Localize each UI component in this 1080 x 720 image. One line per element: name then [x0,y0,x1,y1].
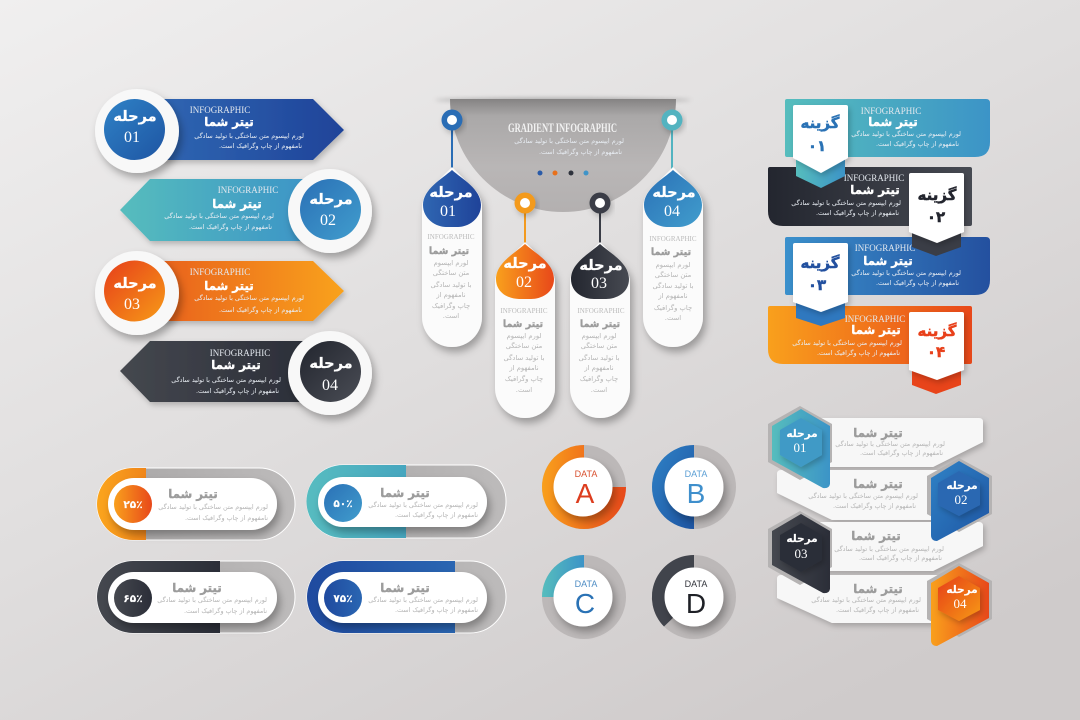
card 1 [422,110,482,347]
card 1: INFOGRAPHIC [427,233,475,241]
card 1: مرحله [429,185,473,201]
donut B: B [687,478,705,509]
pill 50 percent [306,465,506,538]
option 3 ribbon: نامفهوم از چاپ وگرافیک است. [876,279,959,287]
row 1 band: تیتر شما [853,426,903,441]
pill 50 percent: ۵۰٪ [333,498,353,510]
arrow 3 orange: لورم ایپسوم متن ساختگی با تولید سادگی [194,294,304,302]
option 4 ribbon: INFOGRAPHIC [845,314,905,324]
card 3: تیتر شما [580,319,620,330]
dome: نامفهوم از چاپ وگرافیک است. [539,148,622,156]
donut D [652,555,736,639]
donut B: DATA [685,469,707,479]
pill 50 percent: تیتر شما [380,486,430,501]
donut D: DATA [685,579,707,589]
card 4: متن ساختگی [655,270,692,279]
card 1: نامفهوم از [435,291,466,299]
option 1 ribbon: ۰۱ [808,137,826,155]
donut A: A [576,478,595,509]
arrow 3 orange: مرحله [113,276,157,292]
row 4 band: نامفهوم از چاپ وگرافیک است. [836,606,919,614]
dome: GRADIENT INFOGRAPHIC [508,120,617,135]
option 3 ribbon [785,237,990,326]
card 4: INFOGRAPHIC [649,235,697,243]
card 1: 01 [440,203,456,220]
card 4: چاپ وگرافیک [654,303,692,312]
option 4 ribbon [768,306,972,394]
pill 65 percent: تیتر شما [172,581,222,596]
card 2: است. [516,386,532,394]
pill 65 percent: نامفهوم از چاپ وگرافیک است. [184,607,267,615]
pill 75 percent: ۷۵٪ [333,593,353,605]
panel: option ribbons [768,99,990,394]
hexagon 1: 01 [794,440,806,455]
arrow 2 teal: تیتر شما [212,197,262,212]
arrow 4 dark: 04 [322,377,338,394]
pill 25 percent: ۲۵٪ [123,499,143,511]
option 2 ribbon [768,167,972,256]
donut A: DATA [575,469,597,479]
card 4: مرحله [652,185,696,201]
arrow 2 teal: INFOGRAPHIC [218,185,278,195]
arrow 2 teal: مرحله [309,192,353,208]
dome: لورم ایپسوم متن ساختگی با تولید سادگی [514,137,624,145]
row 2 band: لورم ایپسوم متن ساختگی با تولید سادگی [808,492,918,500]
card 3 [570,192,630,418]
pill 50 percent: نامفهوم از چاپ وگرافیک است. [395,511,478,519]
card 3: نامفهوم از [583,364,614,372]
option 1 ribbon [785,99,990,188]
pill 75 percent: لورم ایپسوم متن ساختگی با تولید سادگی [368,596,478,604]
pill 25 percent: نامفهوم از چاپ وگرافیک است. [185,514,268,522]
card 3: 03 [591,275,607,292]
row 4 band: لورم ایپسوم متن ساختگی با تولید سادگی [811,596,921,604]
pill 65 percent: ۶۵٪ [123,593,143,605]
card 4: تیتر شما [651,247,691,258]
pill 25 percent: تیتر شما [168,487,218,502]
card 3: متن ساختگی [581,341,618,350]
card 2 [495,192,555,418]
card 4 [643,110,703,347]
option 4 ribbon: لورم ایپسوم متن ساختگی با تولید سادگی [792,339,902,347]
arrow 1 blue: 01 [124,129,140,146]
arrow 3 orange: نامفهوم از چاپ وگرافیک است. [219,306,302,314]
row 2 band: تیتر شما [853,477,903,492]
option 3 ribbon: لورم ایپسوم متن ساختگی با تولید سادگی [851,269,961,277]
arrow 4 dark: لورم ایپسوم متن ساختگی با تولید سادگی [171,376,281,384]
pill 75 percent [307,561,506,633]
row 3 band: لورم ایپسوم متن ساختگی با تولید سادگی [834,545,944,553]
option 2 ribbon: تیتر شما [850,183,900,198]
donut A [542,445,626,529]
pill 65 percent: لورم ایپسوم متن ساختگی با تولید سادگی [157,596,267,604]
hexagon 2: مرحله [946,480,978,492]
arrow 4 dark: INFOGRAPHIC [210,348,270,358]
pill 65 percent [97,561,295,633]
option 3 ribbon: INFOGRAPHIC [855,243,915,253]
pill 25 percent: لورم ایپسوم متن ساختگی با تولید سادگی [158,503,268,511]
option 1 ribbon: نامفهوم از چاپ وگرافیک است. [876,140,959,148]
option 4 ribbon: گزینه [918,322,957,340]
card 2: INFOGRAPHIC [500,307,548,315]
hexagon 4: مرحله [946,584,978,596]
option 2 ribbon: ۰۲ [927,208,945,226]
card 4: است. [665,314,681,322]
card 3: است. [591,386,607,394]
donut D: D [686,588,706,619]
arrow 4 dark: تیتر شما [211,358,261,373]
row 4 band: تیتر شما [853,582,903,597]
card 1: تیتر شما [429,246,469,257]
card 2: مرحله [503,256,547,272]
arrow 4 dark: مرحله [309,356,353,372]
card 4: با تولید سادگی [652,281,694,290]
row 3 band [820,522,983,571]
arrow 4 dark: نامفهوم از چاپ وگرافیک است. [196,387,279,395]
card 3: لورم ایپسوم [582,332,616,340]
hexagon 1: مرحله [786,428,818,440]
arrow 4 dark [120,331,372,415]
card 1: است. [443,312,459,320]
card 4: لورم ایپسوم [656,261,690,269]
arrow 1 blue: مرحله [113,109,157,125]
row 1 band: لورم ایپسوم متن ساختگی با تولید سادگی [835,440,945,448]
card 2: چاپ وگرافیک [505,374,543,383]
card 1: چاپ وگرافیک [432,301,470,310]
pill 75 percent: تیتر شما [380,581,430,596]
panel: gradient dome with hanging cards [422,98,703,418]
card 3: INFOGRAPHIC [577,307,625,315]
dome [435,98,691,212]
card 2: با تولید سادگی [503,353,545,362]
hexagon 4 [927,563,992,646]
arrow 3 orange [95,251,344,335]
arrow 3 orange: INFOGRAPHIC [190,267,250,277]
hexagon 1 [768,406,832,488]
row 2 band [777,470,940,520]
card 1: متن ساختگی [433,268,470,277]
arrow 2 teal: 02 [320,212,336,229]
hexagon 4: 04 [954,596,967,611]
option 1 ribbon: تیتر شما [868,115,918,130]
row 3 band: نامفهوم از چاپ وگرافیک است. [859,554,942,562]
donut C: DATA [575,579,597,589]
hexagon 2: 02 [954,492,968,507]
donut C [542,555,626,639]
option 2 ribbon: INFOGRAPHIC [844,173,904,183]
card 2: متن ساختگی [506,341,543,350]
arrow 2 teal: نامفهوم از چاپ وگرافیک است. [189,223,272,231]
option 1 ribbon: INFOGRAPHIC [861,106,921,116]
card 4: 04 [664,203,680,220]
card 3: مرحله [579,258,623,274]
option 2 ribbon: لورم ایپسوم متن ساختگی با تولید سادگی [791,199,901,207]
row 3 band: تیتر شما [851,529,901,544]
card 4: نامفهوم از [657,292,688,300]
row 1 band: نامفهوم از چاپ وگرافیک است. [860,449,943,457]
hexagon 3: 03 [794,546,808,561]
option 3 ribbon: تیتر شما [863,254,913,269]
card 1: با تولید سادگی [430,280,472,289]
arrow 1 blue: لورم ایپسوم متن ساختگی با تولید سادگی [194,132,304,140]
hexagon 3 [768,511,832,593]
panel: percent pills [97,465,506,633]
pill 25 percent [97,468,295,540]
panel: donut charts [542,445,736,639]
option 1 ribbon: لورم ایپسوم متن ساختگی با تولید سادگی [851,130,961,138]
hexagon 3: مرحله [786,533,818,545]
donut B [652,445,736,529]
option 4 ribbon: نامفهوم از چاپ وگرافیک است. [817,349,900,357]
option 3 ribbon: ۰۳ [808,276,826,294]
hexagon 2 [927,458,992,541]
arrow 1 blue [95,89,344,173]
row 1 band [820,418,983,467]
panel: hexagon steps [768,406,992,646]
panel: step arrows [95,89,372,415]
arrow 2 teal [120,169,372,253]
option 2 ribbon: نامفهوم از چاپ وگرافیک است. [816,209,899,217]
card 2: لورم ایپسوم [507,332,541,340]
option 1 ribbon: گزینه [801,114,840,132]
card 2: تیتر شما [503,319,543,330]
arrow 1 blue: تیتر شما [204,115,254,130]
arrow 2 teal: لورم ایپسوم متن ساختگی با تولید سادگی [164,212,274,220]
option 2 ribbon: گزینه [918,186,957,204]
card 3: چاپ وگرافیک [580,374,618,383]
donut C: C [575,588,595,619]
card 3: با تولید سادگی [578,353,620,362]
card 1: لورم ایپسوم [434,259,468,267]
arrow 3 orange: 03 [124,296,140,313]
card 2: نامفهوم از [508,364,539,372]
row 4 band [777,575,940,623]
card 2: 02 [516,274,532,291]
arrow 1 blue: نامفهوم از چاپ وگرافیک است. [219,142,302,150]
option 3 ribbon: گزینه [801,254,840,272]
pill 50 percent: لورم ایپسوم متن ساختگی با تولید سادگی [368,501,478,509]
row 2 band: نامفهوم از چاپ وگرافیک است. [833,502,916,510]
pill 75 percent: نامفهوم از چاپ وگرافیک است. [395,606,478,614]
arrow 3 orange: تیتر شما [204,279,254,294]
arrow 1 blue: INFOGRAPHIC [190,105,250,115]
option 4 ribbon: تیتر شما [851,323,901,338]
option 4 ribbon: ۰۴ [927,343,945,361]
